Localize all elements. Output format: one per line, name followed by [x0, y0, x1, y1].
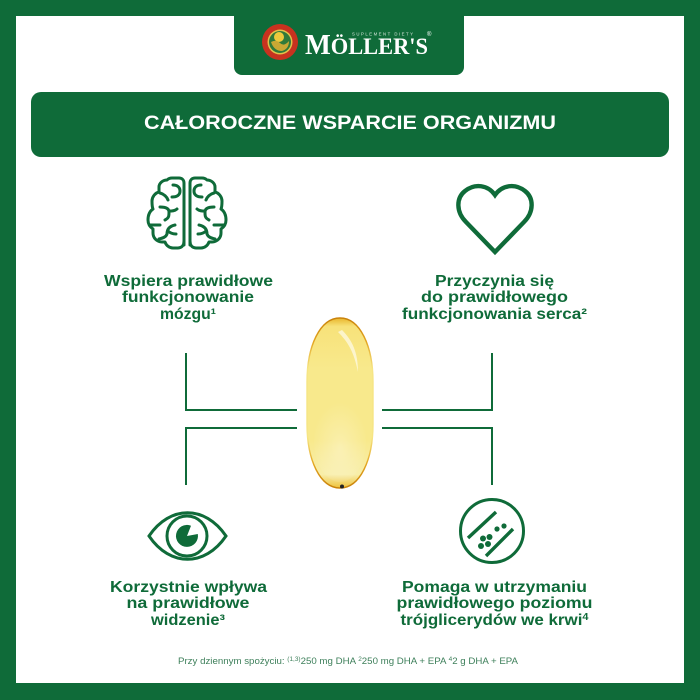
title banner: [31, 92, 669, 157]
icon: triglycerides circle: [460, 500, 524, 562]
logo wordmark: MÖLLER'S: [305, 30, 428, 61]
text: heart benefit: [402, 273, 587, 323]
footnote: 4: [449, 657, 453, 663]
icon: heart: [458, 186, 532, 252]
text: vision benefit: Korzystnie wpływa: [110, 579, 267, 596]
capsule: [307, 318, 373, 488]
text: brain benefit: Wspiera prawidłowe: [104, 273, 273, 290]
logo subtitle: SUPLEMENT DIETY: [352, 32, 413, 36]
icon: eye: [149, 513, 226, 559]
text: triglycerides benefit: Pomaga w utrzymaniu: [402, 579, 587, 596]
text: triglycerides benefit: prawidłowego poziomu: [396, 595, 592, 612]
logo tab: [234, 10, 464, 75]
text: vision benefit: na prawidłowe: [126, 595, 250, 612]
text: heart benefit: do prawidłowego: [421, 289, 568, 306]
text: brain benefit: [104, 273, 273, 323]
footnote: (1,3): [287, 657, 301, 663]
text: triglycerides benefit: 4: [582, 612, 589, 623]
text: brain benefit: funkcjonowanie: [122, 289, 254, 306]
icon: logo emblem: [262, 24, 298, 60]
footnote: Przy dziennym spożyciu:: [178, 656, 277, 666]
text: brain benefit: mózgu¹: [160, 306, 216, 323]
title: CAŁOROCZNE WSPARCIE ORGANIZMU: [144, 113, 556, 134]
text: vision benefit: [110, 579, 267, 629]
text: triglycerides benefit: trójglicerydów we krwi: [400, 612, 567, 629]
connector lines: [186, 353, 492, 485]
footnote: 250 mg DHA + EPA: [362, 656, 449, 666]
icon: brain: [148, 178, 226, 248]
text: triglycerides benefit: [396, 579, 592, 629]
text: heart benefit: funkcjonowania serca²: [402, 306, 587, 323]
footnote: 2: [358, 657, 363, 663]
text: vision benefit: widzenie³: [150, 612, 225, 629]
footnote: 2 g DHA + EPA: [452, 656, 518, 666]
text: heart benefit: Przyczynia się: [435, 273, 554, 290]
registered mark: ®: [427, 31, 432, 38]
footnote: 250 mg DHA: [301, 656, 358, 666]
